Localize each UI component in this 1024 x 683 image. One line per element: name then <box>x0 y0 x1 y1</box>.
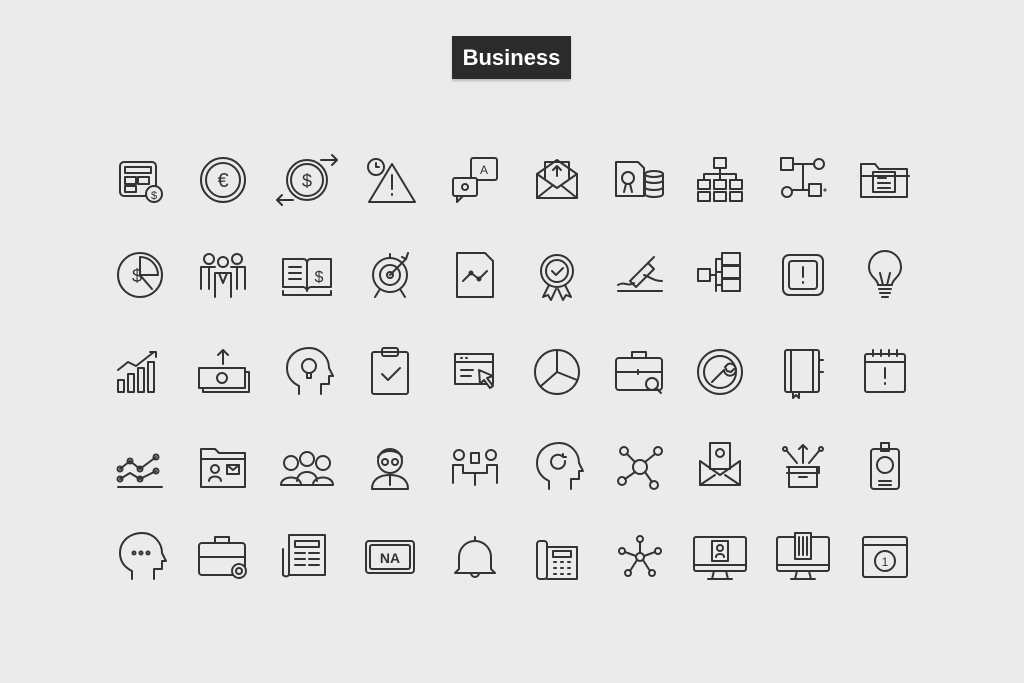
icon: pie dollar <box>118 253 162 297</box>
icon: window coin: 1 <box>882 555 889 569</box>
icon: head speech <box>120 533 166 579</box>
icon: euro coin: € <box>217 170 229 192</box>
icon: money upload <box>199 350 249 392</box>
icon: id badge <box>871 443 899 489</box>
icon: browser cursor <box>455 354 493 388</box>
icon: calculator dollar: $ <box>151 190 157 202</box>
icon: window coin <box>863 537 907 577</box>
icon: NA badge <box>366 541 414 573</box>
icon: desk phone <box>537 541 577 579</box>
icon: light bulb <box>869 251 901 297</box>
icon: head idea <box>287 348 333 394</box>
icon: book dollar <box>283 259 331 295</box>
icon: org chart <box>698 158 742 201</box>
icon: calculator dollar <box>120 162 162 202</box>
icon: bar chart growth <box>118 352 156 392</box>
icon: notebook <box>785 350 823 398</box>
icon: translate chat: A <box>480 163 488 177</box>
icon: group <box>281 452 333 485</box>
icon: envelope upload <box>537 160 577 198</box>
icon: meeting <box>453 450 497 485</box>
icon: line graph nodes <box>118 454 162 487</box>
icon: team <box>201 254 245 297</box>
icon: envelope money <box>700 443 740 485</box>
icon: box ideas <box>783 445 823 487</box>
icon: businessman glasses <box>372 449 408 489</box>
icon: certificate coins <box>616 162 663 197</box>
icon: document chart <box>457 253 493 297</box>
icon: bell <box>455 537 495 577</box>
icon: clipboard check <box>372 348 408 394</box>
icon: briefcase gear <box>199 537 246 578</box>
icon: head refresh <box>537 443 583 489</box>
icon: monitor profile <box>694 537 746 579</box>
icon: monitor document <box>777 533 829 579</box>
icon: hierarchy <box>698 253 740 291</box>
icon: pie chart <box>535 350 579 394</box>
icon: warning clock <box>368 159 415 202</box>
title <box>452 36 571 79</box>
icon: calendar alert <box>865 350 905 392</box>
icon: briefcase search <box>616 352 662 393</box>
icon: network <box>618 447 662 489</box>
icon: hub nodes <box>619 536 661 576</box>
icon: pie dollar: $ <box>132 266 142 286</box>
icon: book dollar: $ <box>315 269 324 286</box>
icon: signing hand <box>618 257 662 291</box>
icon: NA badge: NA <box>380 550 400 566</box>
icon: newspaper <box>283 535 325 576</box>
icon: dollar exchange: $ <box>302 171 312 191</box>
icon: folder doc <box>861 164 909 197</box>
title: Business <box>463 45 560 70</box>
icon: badge check <box>541 255 573 300</box>
icon: target <box>373 253 408 297</box>
icon: dollar exchange <box>277 155 337 205</box>
icon: alert square <box>783 255 823 295</box>
icon: flow nodes <box>781 158 826 197</box>
icon: folder contact <box>201 449 245 487</box>
icon: euro coin <box>201 158 245 202</box>
icon: settings wrench <box>698 350 742 394</box>
icon: translate chat <box>453 158 497 202</box>
